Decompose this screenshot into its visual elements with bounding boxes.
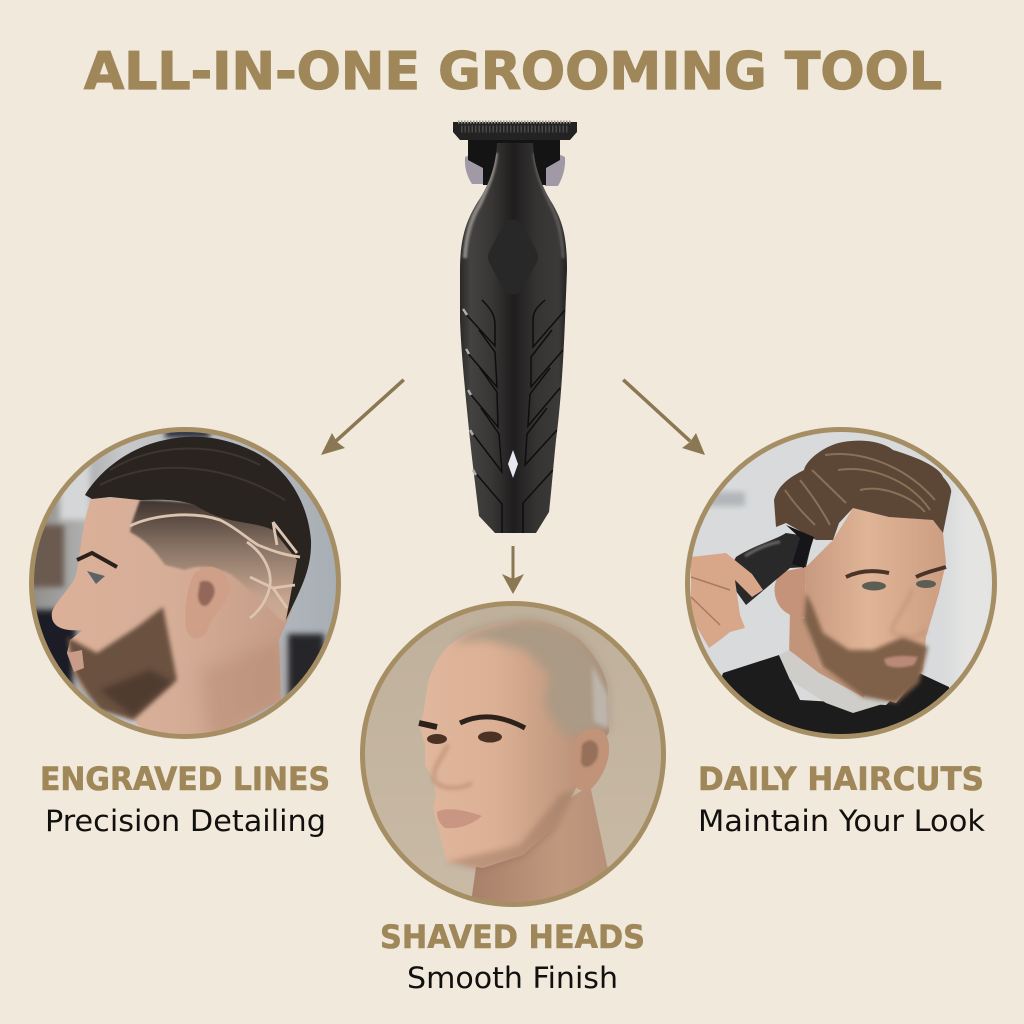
panel: engraved lines photo bbox=[30, 428, 340, 745]
nose shadow bbox=[892, 590, 926, 637]
ear bbox=[185, 567, 229, 638]
arrow: to daily haircuts bbox=[622, 378, 705, 455]
brows bbox=[846, 571, 889, 577]
title: ALL-IN-ONE GROOMING TOOL bbox=[84, 42, 942, 102]
fade area bbox=[130, 500, 305, 622]
caption: shaved heads: Smooth Finish bbox=[407, 961, 618, 995]
eyes bbox=[427, 734, 447, 744]
caption: engraved lines bbox=[40, 760, 330, 838]
caption: daily haircuts: DAILY HAIRCUTS bbox=[698, 760, 984, 798]
engraved design bbox=[130, 515, 300, 618]
lips bbox=[437, 809, 482, 828]
beard bbox=[804, 593, 928, 703]
brows bbox=[419, 723, 437, 727]
neck shadow bbox=[202, 642, 285, 732]
arrow: to shaved heads bbox=[502, 546, 524, 594]
neck bbox=[789, 614, 864, 698]
caption: daily haircuts bbox=[698, 760, 985, 838]
LED indicator bbox=[508, 450, 518, 478]
caption: shaved heads: SHAVED HEADS bbox=[380, 918, 645, 956]
trimmer in hand bbox=[734, 533, 812, 605]
caption: daily haircuts: Maintain Your Look bbox=[698, 804, 985, 838]
hair bbox=[774, 441, 951, 540]
jaw shadow bbox=[447, 790, 575, 870]
beard bbox=[67, 607, 177, 720]
nose bbox=[434, 745, 472, 788]
arrow: to engraved lines bbox=[321, 378, 405, 455]
neck bbox=[472, 789, 608, 902]
icon: trimmer bbox=[453, 122, 577, 533]
skin: face and neck bbox=[52, 498, 292, 745]
cape bbox=[722, 655, 950, 734]
panel: daily haircuts photo bbox=[686, 428, 1000, 745]
panel: shaved heads photo bbox=[362, 604, 664, 910]
caption: engraved lines: ENGRAVED LINES bbox=[40, 760, 330, 798]
ear bbox=[775, 567, 806, 617]
caption: shaved heads bbox=[380, 918, 645, 995]
stubble crown bbox=[452, 619, 609, 735]
collar bbox=[779, 650, 886, 713]
ear bbox=[573, 728, 609, 790]
head bbox=[419, 619, 609, 868]
face bbox=[804, 508, 946, 703]
hair bbox=[85, 437, 311, 620]
hand bbox=[691, 553, 763, 648]
diamond grip bbox=[488, 220, 538, 294]
brow and eye bbox=[77, 553, 117, 567]
caption: engraved lines: Precision Detailing bbox=[45, 804, 326, 838]
eyes bbox=[862, 582, 886, 590]
